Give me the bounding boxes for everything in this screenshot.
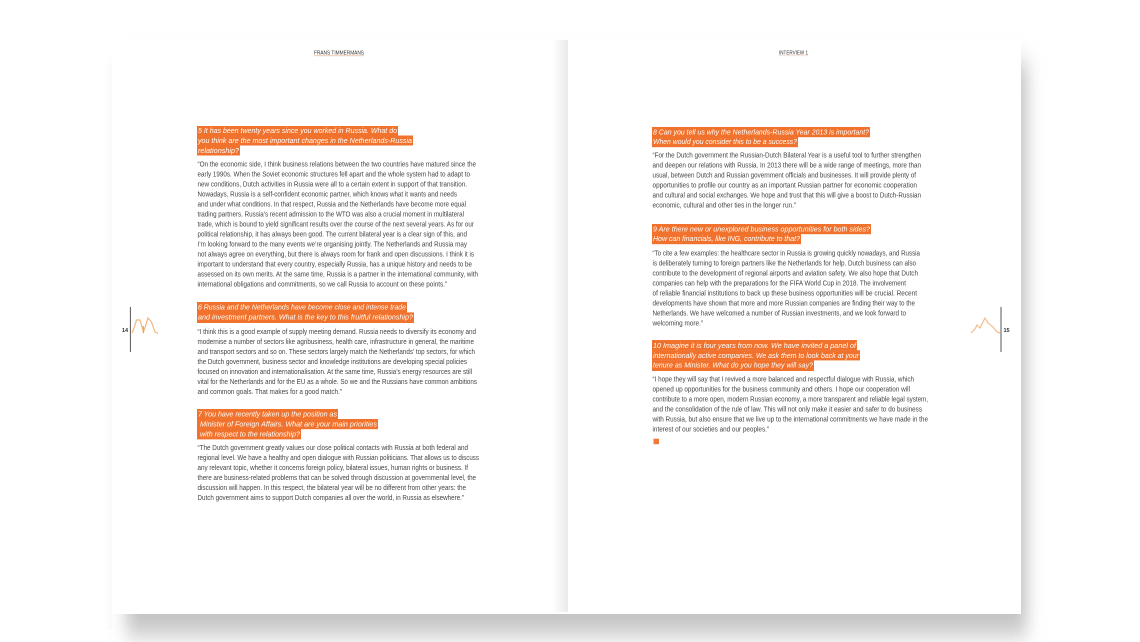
answer 10 text: with Russia, but also ensure that we live up to the international commitments we have made in the <box>652 417 928 424</box>
question 5 heading: 5 It has been twenty years since you worked in Russia. What do <box>198 128 397 135</box>
question 7 heading: Minister of Foreign Affairs. What are your main priorities <box>200 421 378 428</box>
answer 6 text <box>198 329 477 396</box>
answer 9 text: Netherlands. We have welcomed a number of Russian investments, and we look forward to <box>652 311 906 318</box>
answer 9 text: companies can help with the preparations for the FIFA World Cup in 2018. The involvement <box>652 281 906 288</box>
page number 14 with skyline icon <box>122 307 158 352</box>
right page sheet <box>568 40 1021 614</box>
question 10 heading: internationally active companies. We ask them to look back at your <box>653 353 860 360</box>
answer 7 text: discussion will happen. In this respect, the bilateral year will be no different from other years: the <box>198 485 466 492</box>
question 9 heading <box>652 224 871 244</box>
answer 6 text: focused on innovation and internationalisation. At the same time, Russia’s energy resources are still <box>198 369 472 376</box>
page drop shadow <box>126 62 1027 635</box>
page number 15 with skyline icon <box>971 307 1010 352</box>
answer 10 text: “I hope they will say that I revived a more balanced and respectful dialogue with Russia, which <box>652 377 914 384</box>
answer 10 text <box>652 377 928 434</box>
answer 5 text <box>198 162 478 289</box>
answer 5 text: trade, which is bound to yield significant results over the course of the next several years. As for our <box>198 222 475 229</box>
right page <box>652 51 1010 444</box>
answer 5 text: important to understand that every country, especially Russia, has a unique history and needs to be <box>198 262 472 269</box>
answer 5 text: assessed on its own merits. At the same time, Russia is a partner in the international community, with <box>198 272 478 279</box>
answer 6 text: “I think this is a good example of supply meeting demand. Russia needs to diversify its economy and <box>198 329 476 336</box>
answer 9 text <box>652 251 920 328</box>
question 5 heading: you think are the most important changes in the Netherlands-Russia <box>197 138 412 145</box>
question 7 heading: with respect to the relationship? <box>200 431 300 438</box>
left page <box>122 51 479 502</box>
answer 10 text: contribute to a more open, modern Russian economy, a more transparent and reliable legal system, <box>652 397 928 404</box>
question 7 heading <box>197 409 378 439</box>
answer 5 text: Nowadays, Russia is a self-confident economic partner, which knows what it wants and needs <box>198 192 457 199</box>
answer 6 text: vital for the Netherlands and for the EU as a whole. So we and the Russians have common ambitions <box>198 379 477 386</box>
answer 9 text: welcoming more.” <box>652 321 704 328</box>
answer 5 text: new conditions, Dutch activities in Russia were all to a certain extent in support of that transition. <box>198 182 467 189</box>
answer 8 text <box>652 153 921 210</box>
answer 8 text: opportunities to profile our country as an important Russian partner for economic cooperation <box>652 183 917 190</box>
answer 8 text: usual, between Dutch and Russian government officials and businesses. It will provide plenty of <box>652 173 916 180</box>
answer 8 text: economic, cultural and other ties in the longer run.” <box>652 203 797 210</box>
question 10 heading <box>652 340 860 371</box>
answer 8 text: and deepen our relations with Russia. In 2013 there will be a wide range of meetings, more than <box>652 163 921 170</box>
answer 5 text: political relationship, it has always been good. The current bilateral year is a clear sign of this, and <box>198 232 467 239</box>
question 10 heading: 10 Imagine it is four years from now. We have invited a panel of <box>653 343 857 350</box>
answer 9 text: contribute to the development of regional airports and aviation safety. We also hope that Dutch <box>652 271 918 278</box>
question 8 heading <box>652 127 870 147</box>
answer 9 text: is deliberately turning to foreign partners like the Netherlands for help. Dutch business can also <box>652 261 916 268</box>
answer 9 text: developments have shown that more and more Russian companies are finding their way to the <box>652 301 915 308</box>
answer 7 text: regional level. We have a healthy and open dialogue with Russian politicians. That allows us to discuss <box>198 455 479 462</box>
answer 10 text: opened up opportunities for the business community and others. I hope our cooperation will <box>652 387 910 394</box>
answer 5 text: not always agree on everything, but there is always room for frank and open discussions. I think it is <box>198 252 474 259</box>
question 9 heading: How can financials, like ING, contribute to that? <box>653 236 800 243</box>
answer 5 text: I’m looking forward to the many events we’re organising jointly. The Netherlands and Russia may <box>198 242 467 249</box>
question 10 heading: tenure as Minister. What do you hope they will say? <box>653 362 813 369</box>
answer 6 text: and transport sectors and so on. These sectors largely match the Netherlands’ top sectors, for which <box>198 349 475 356</box>
answer 6 text: the Dutch government, business sector and knowledge institutions are developing special policies <box>198 359 467 366</box>
answer 5 text: international obligations and commitments, so we call Russia to account on these points.” <box>198 282 448 289</box>
answer 10 text: interest of our societies and our peoples.” <box>652 427 770 434</box>
question 8 heading: When would you consider this to be a success? <box>653 139 797 146</box>
answer 5 text: early 1990s. When the Soviet economic structures fell apart and the whole system had to adapt to <box>198 172 470 179</box>
left page sheet <box>112 40 568 614</box>
answer 7 text: there are business-related problems that can be solved through discussion at governmental level, the <box>198 475 476 482</box>
end-of-article square marker <box>654 439 659 444</box>
question 5 heading: relationship? <box>198 148 239 155</box>
running header: Interview 1: INTERVIEW 1 <box>779 51 808 57</box>
question 7 heading: 7 You have recently taken up the position as <box>198 411 338 418</box>
answer 5 text: “On the economic side, I think business relations between the two countries have matured since the <box>198 162 476 169</box>
question 5 heading <box>197 126 413 156</box>
answer 5 text: trading partners. Russia’s recent admission to the WTO was also a crucial moment in multilateral <box>198 212 464 219</box>
answer 10 text: and the consolidation of the rule of law. This will not only make it easier and safer to do business <box>652 407 923 414</box>
answer 7 text: Dutch government aims to support Dutch companies all over the world, in Russia as elsewhere.” <box>198 495 465 502</box>
answer 7 text: “The Dutch government greatly values our close political contacts with Russia at both federal and <box>198 445 468 452</box>
question 6 heading: and investment partners. What is the key to this fruitful relationship? <box>198 314 413 321</box>
question 8 heading: 8 Can you tell us why the Netherlands-Russia Year 2013 is important? <box>653 129 869 136</box>
page number 15 with skyline icon: 15 <box>1004 328 1010 334</box>
answer 6 text: and common goals. That makes for a good match.” <box>198 389 343 396</box>
question 6 heading <box>197 302 414 323</box>
question 9 heading: 9 Are there new or unexplored business opportunities for both sides? <box>653 226 870 233</box>
left edge shadow <box>105 64 112 630</box>
question 6 heading: 6 Russia and the Netherlands have become close and intense trade <box>198 304 406 311</box>
answer 9 text: of reliable financial institutions to back up these business opportunities will be crucial. Recent <box>652 291 917 298</box>
running header: Frans Timmermans: FRANS TIMMERMANS <box>314 51 365 57</box>
centre gutter shading <box>553 40 568 612</box>
answer 5 text: and under what conditions. In that respect, Russia and the Netherlands have become more equal <box>198 202 466 209</box>
answer 7 text: any relevant topic, whether it concerns foreign policy, bilateral issues, human rights or business. If <box>198 465 468 472</box>
answer 8 text: and cultural and social exchanges. We hope and trust that this will give a boost to Dutch-Russian <box>652 193 921 200</box>
page number 14 with skyline icon: 14 <box>122 328 129 334</box>
answer 9 text: “To cite a few examples: the healthcare sector in Russia is growing quickly nowadays, and Russia <box>652 251 920 258</box>
answer 7 text <box>198 445 479 502</box>
answer 6 text: modernise a number of sectors like agribusiness, health care, infrastructure in general, the maritime <box>198 339 474 346</box>
answer 8 text: “For the Dutch government the Russian-Dutch Bilateral Year is a useful tool to further strengthen <box>652 153 921 160</box>
